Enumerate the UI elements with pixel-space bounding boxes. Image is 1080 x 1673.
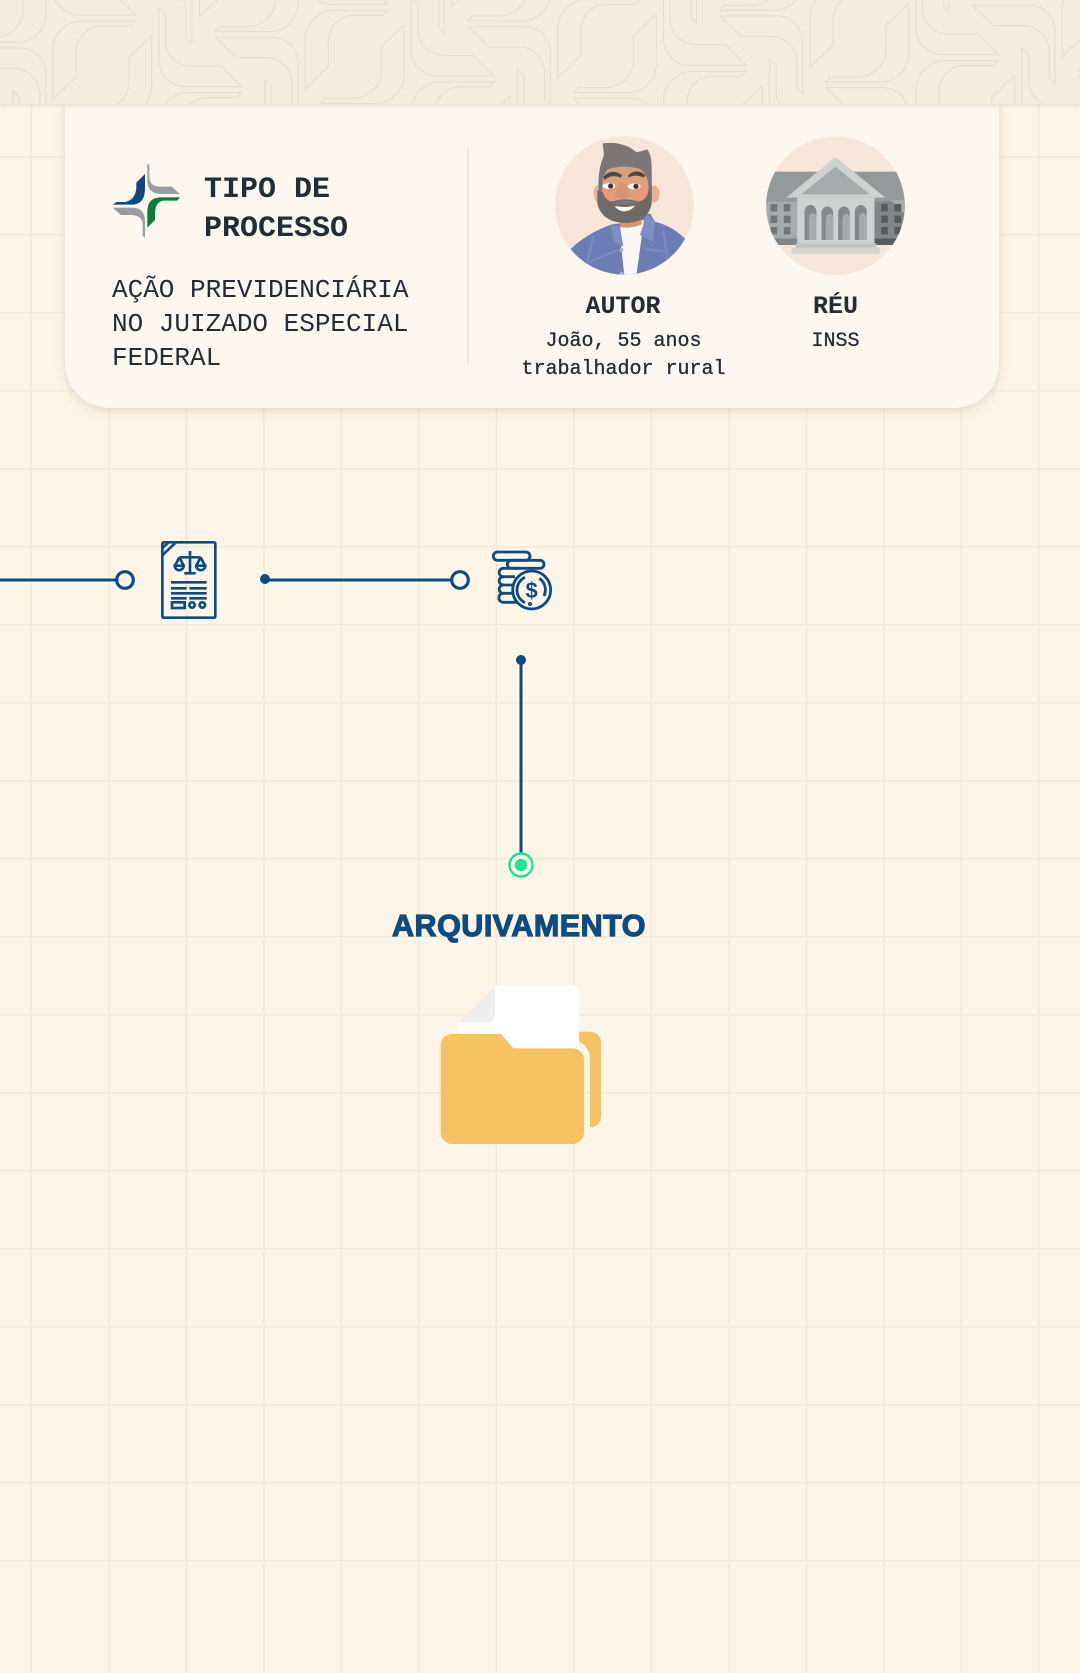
- icon: coins: $: [526, 578, 538, 603]
- panel: process card: [65, 100, 999, 408]
- text: process description: AÇÃO PREVIDENCIÁRIA: [112, 275, 409, 305]
- icon: folder with document: [441, 986, 601, 1144]
- label: autor: [521, 292, 726, 381]
- heading: arquivamento: ARQUIVAMENTO: [392, 909, 646, 943]
- top pattern band: [0, 0, 1080, 108]
- label: autor: trabalhador rural: [521, 358, 726, 381]
- text: process description: NO JUIZADO ESPECIAL: [112, 309, 408, 339]
- divider: [467, 148, 469, 364]
- icon: author avatar: [555, 136, 694, 275]
- connector: vertical line to end marker: [510, 655, 532, 876]
- label: autor: AUTOR: [585, 292, 661, 321]
- label: autor: João, 55 anos: [545, 330, 702, 353]
- connector: line between icons: [260, 572, 468, 588]
- icon: court building: [764, 136, 907, 275]
- label: reu: INSS: [811, 330, 860, 353]
- icon: legal document with scales: [162, 542, 215, 618]
- connector: line to first ring: [0, 572, 133, 588]
- label: reu: RÉU: [813, 291, 858, 321]
- label: reu: [811, 291, 860, 353]
- heading: tipo de processo: TIPO DE: [204, 173, 330, 207]
- text: process description: FEDERAL: [112, 343, 221, 373]
- icon: logo: [113, 163, 180, 238]
- heading: tipo de processo: PROCESSO: [204, 212, 348, 246]
- icon: coins: [493, 552, 551, 609]
